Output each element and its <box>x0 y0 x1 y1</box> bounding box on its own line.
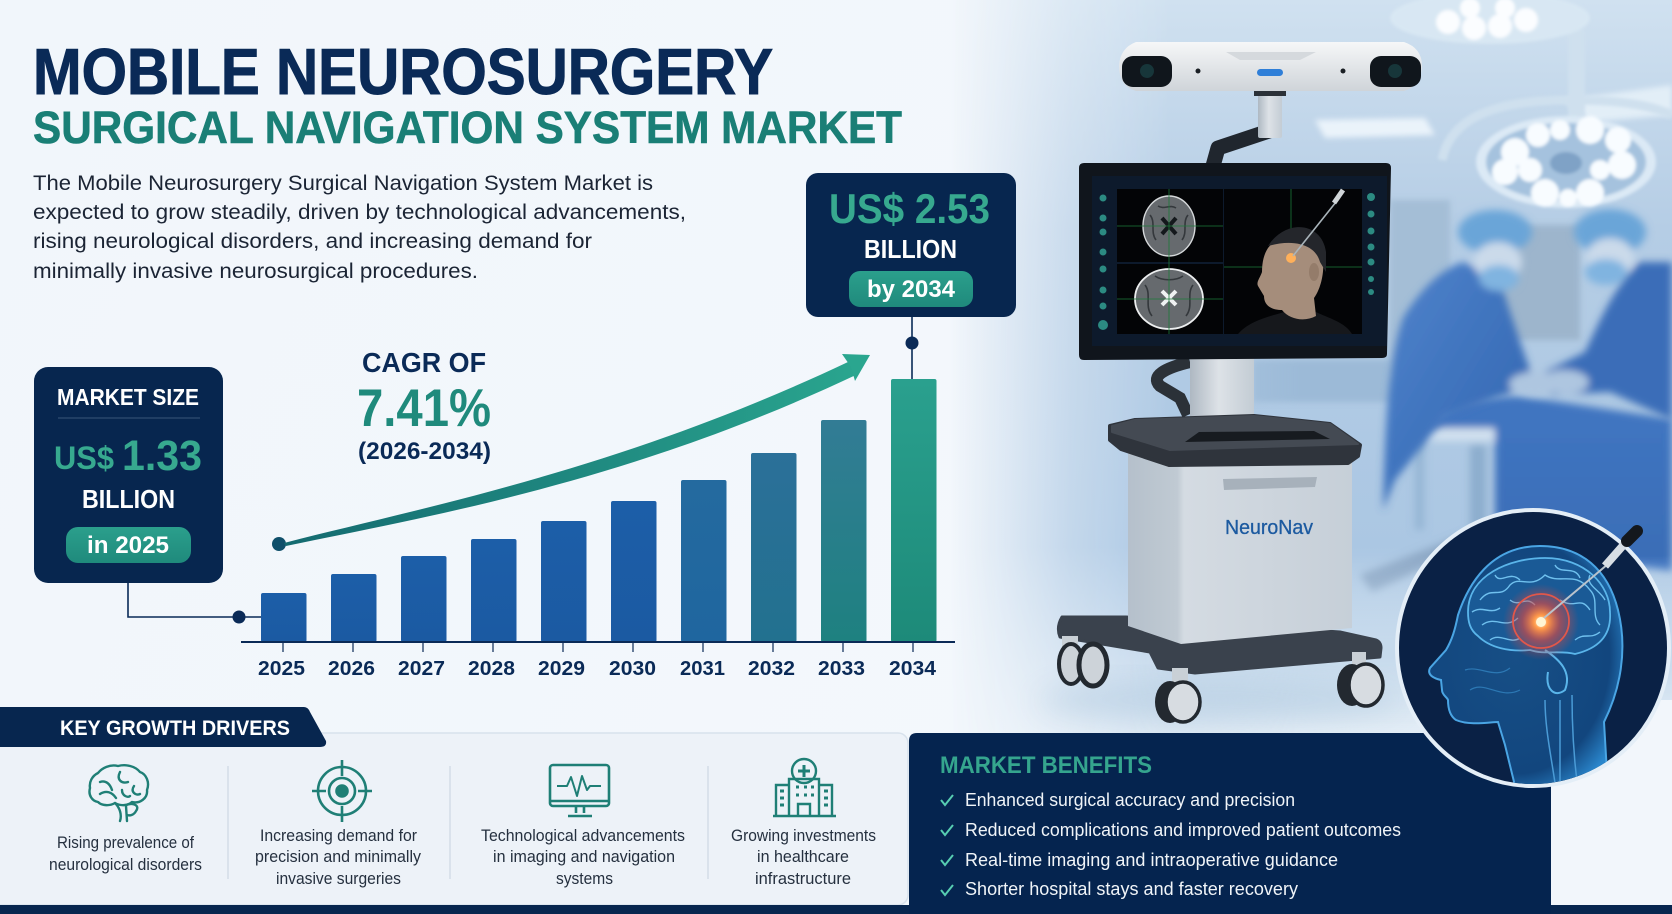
operating table <box>1360 396 1672 592</box>
bar chart: 2030 <box>609 657 656 680</box>
target glow <box>1503 584 1579 660</box>
intro paragraph: minimally invasive neurosurgical procedures. <box>33 259 478 283</box>
bar chart: 2033 <box>818 657 865 680</box>
cart cabinet <box>1128 445 1352 644</box>
callout: 2025 market size: MARKET SIZE <box>57 384 199 410</box>
icon: hospital <box>773 759 836 816</box>
surgical lights <box>1390 0 1672 208</box>
title: SURGICAL NAVIGATION SYSTEM MARKET <box>33 102 902 153</box>
bar chart: 2029 <box>538 657 585 680</box>
stand column <box>1190 355 1254 429</box>
benefit list: Real-time imaging and intraoperative guidance <box>965 849 1338 870</box>
navigation cart device <box>1040 42 1422 723</box>
intro paragraph: rising neurological disorders, and increasing demand for <box>33 229 592 253</box>
heading tab <box>0 707 326 747</box>
text: healthcare investments: in healthcare <box>757 848 849 866</box>
callout: 2034 market value: by 2034 <box>867 276 956 303</box>
head model on screen <box>1238 190 1352 334</box>
tracking camera bar <box>1119 42 1422 91</box>
text: healthcare investments: infrastructure <box>755 870 851 888</box>
text: precision surgery demand: invasive surgeries <box>276 870 401 888</box>
brain <box>1465 558 1610 790</box>
callout: 2025 market size: US$ <box>54 440 114 476</box>
callout: 2034 market value <box>806 173 1016 379</box>
intro paragraph: expected to grow steadily, driven by technological advancements, <box>33 200 686 224</box>
text: technological advancements <box>481 827 685 888</box>
callout: 2025 market size: 1.33 <box>122 432 202 480</box>
bar chart: 2027 <box>398 657 445 680</box>
intro paragraph: The Mobile Neurosurgery Surgical Navigation System Market is <box>33 171 653 195</box>
panel: market benefits: MARKET BENEFITS <box>940 752 1152 779</box>
callout: 2034 market value: BILLION <box>864 236 957 264</box>
rear support arm <box>1157 362 1190 415</box>
callout: CAGR: (2026-2034) <box>358 438 491 465</box>
surgical probe <box>1544 531 1637 618</box>
bar chart: 2026 <box>328 657 375 680</box>
callout: 2025 market size: BILLION <box>82 486 175 514</box>
icon: monitor with heartbeat <box>550 765 609 816</box>
text: technological advancements: Technological advancements <box>481 827 685 845</box>
bottom band <box>0 905 1672 914</box>
text: rising prevalence <box>49 834 202 874</box>
bar chart: 2028 <box>468 657 515 680</box>
benefit list: Reduced complications and improved patient outcomes <box>965 819 1401 840</box>
text: precision surgery demand: Increasing demand for <box>260 827 417 845</box>
panel: key growth drivers <box>0 707 908 905</box>
callout: CAGR: 7.41% <box>357 379 491 438</box>
callout: 2025 market size: in 2025 <box>87 532 169 559</box>
text: rising prevalence: Rising prevalence of <box>57 834 194 852</box>
bar chart <box>241 379 955 680</box>
side toolbars <box>1098 193 1375 330</box>
bar chart: 2025 <box>258 657 305 680</box>
text: healthcare investments <box>731 827 876 888</box>
monitor <box>1079 163 1391 360</box>
text: healthcare investments: Growing investments <box>731 827 876 845</box>
callout: 2025 market size <box>34 367 261 624</box>
surgeons <box>1383 209 1672 510</box>
icon: brain <box>89 765 148 821</box>
growth arrow <box>272 354 870 551</box>
text: precision surgery demand <box>255 827 422 888</box>
panel: market benefits <box>909 733 1551 914</box>
cart wheels <box>1059 636 1383 723</box>
camera arm <box>1213 88 1286 166</box>
benefit list: Shorter hospital stays and faster recovery <box>965 878 1299 899</box>
text: precision surgery demand: precision and minimally <box>255 848 422 866</box>
text: rising prevalence: neurological disorders <box>49 856 202 874</box>
cart base <box>1058 617 1381 673</box>
operating room photo backdrop <box>970 0 1672 733</box>
text: technological advancements: systems <box>556 870 613 888</box>
benefit list: Enhanced surgical accuracy and precision <box>965 789 1295 810</box>
bar chart: 2034 <box>889 657 937 680</box>
text: technological advancements: in imaging and navigation <box>493 848 675 866</box>
callout: CAGR <box>357 347 491 465</box>
cart tray <box>1110 416 1360 465</box>
brain scan bottom <box>1135 269 1203 329</box>
brain scan top <box>1143 196 1195 256</box>
circular brain navigation inset <box>1397 510 1669 790</box>
title: MOBILE NEUROSURGERY <box>33 35 773 108</box>
right white corner panel <box>1530 700 1672 905</box>
callout: CAGR: CAGR OF <box>362 347 486 378</box>
floor shadow under cart <box>1040 678 1400 722</box>
title <box>33 35 902 153</box>
intro paragraph <box>33 171 686 283</box>
bar chart: 2032 <box>748 657 795 680</box>
head silhouette <box>1429 546 1622 790</box>
icon: target <box>312 760 372 822</box>
benefit list <box>941 789 1401 899</box>
cabinet handle <box>1223 477 1317 490</box>
heading tab: KEY GROWTH DRIVERS <box>60 717 290 740</box>
cabinet brand: NeuroNav <box>1225 517 1313 539</box>
bar chart: 2031 <box>680 657 725 680</box>
callout: 2034 market value: US$ 2.53 <box>829 185 990 232</box>
